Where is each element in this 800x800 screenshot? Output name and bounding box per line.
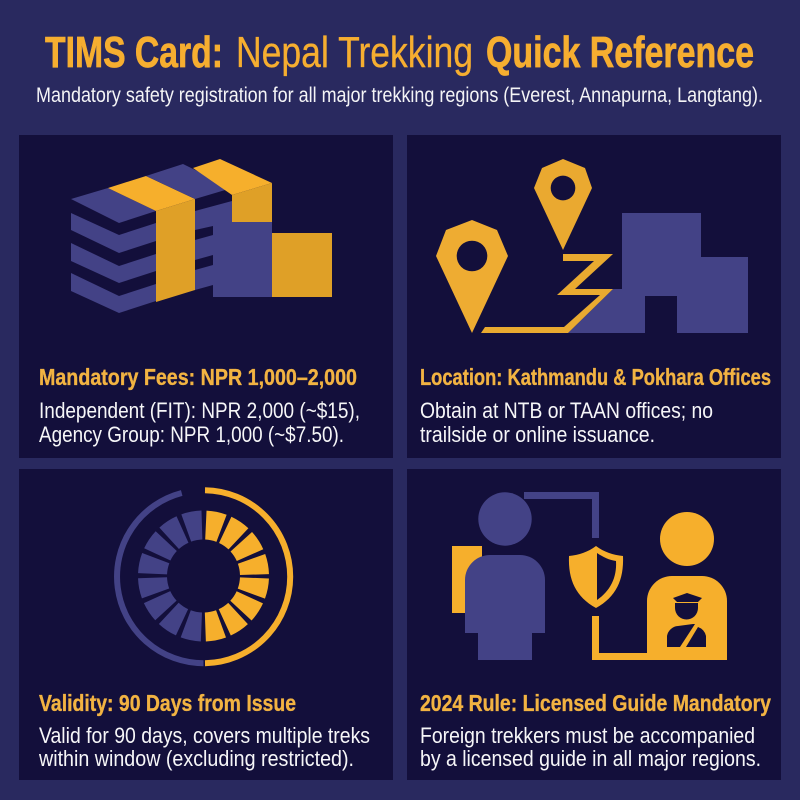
icon: 90 day dial <box>117 490 290 663</box>
text: validity detail <box>38 723 370 771</box>
title: Nepal Trekking <box>236 28 473 77</box>
title <box>45 28 754 77</box>
text: guide rule detail: Foreign trekkers must be accompanied <box>420 723 755 748</box>
text: location detail <box>420 398 713 447</box>
text: validity detail: within window (excluding restricted). <box>38 746 354 771</box>
icon: map pins, route and building <box>436 159 748 333</box>
text: location detail: Obtain at NTB or TAAN offices; no <box>420 398 713 423</box>
panel: location <box>407 135 781 458</box>
heading: validity: Validity: 90 Days from Issue <box>39 690 296 716</box>
text: guide rule detail <box>420 723 761 771</box>
text: validity detail: Valid for 90 days, covers multiple treks <box>39 723 370 748</box>
heading: fees: Mandatory Fees: NPR 1,000–2,000 <box>39 364 357 390</box>
panel: validity <box>19 469 393 780</box>
text: location detail: trailside or online issuance. <box>420 422 655 447</box>
text: fees detail <box>39 398 360 447</box>
panel: guide rule <box>407 469 781 780</box>
title: TIMS Card: <box>45 28 223 77</box>
text: fees detail: Independent (FIT): NPR 2,000 (~$15), <box>39 398 360 423</box>
icon: trekker, shield and guide <box>452 492 727 660</box>
text: fees detail: Agency Group: NPR 1,000 (~$7.50). <box>39 422 344 447</box>
icon: banknote stack <box>71 159 332 313</box>
panel: mandatory fees <box>19 135 393 458</box>
